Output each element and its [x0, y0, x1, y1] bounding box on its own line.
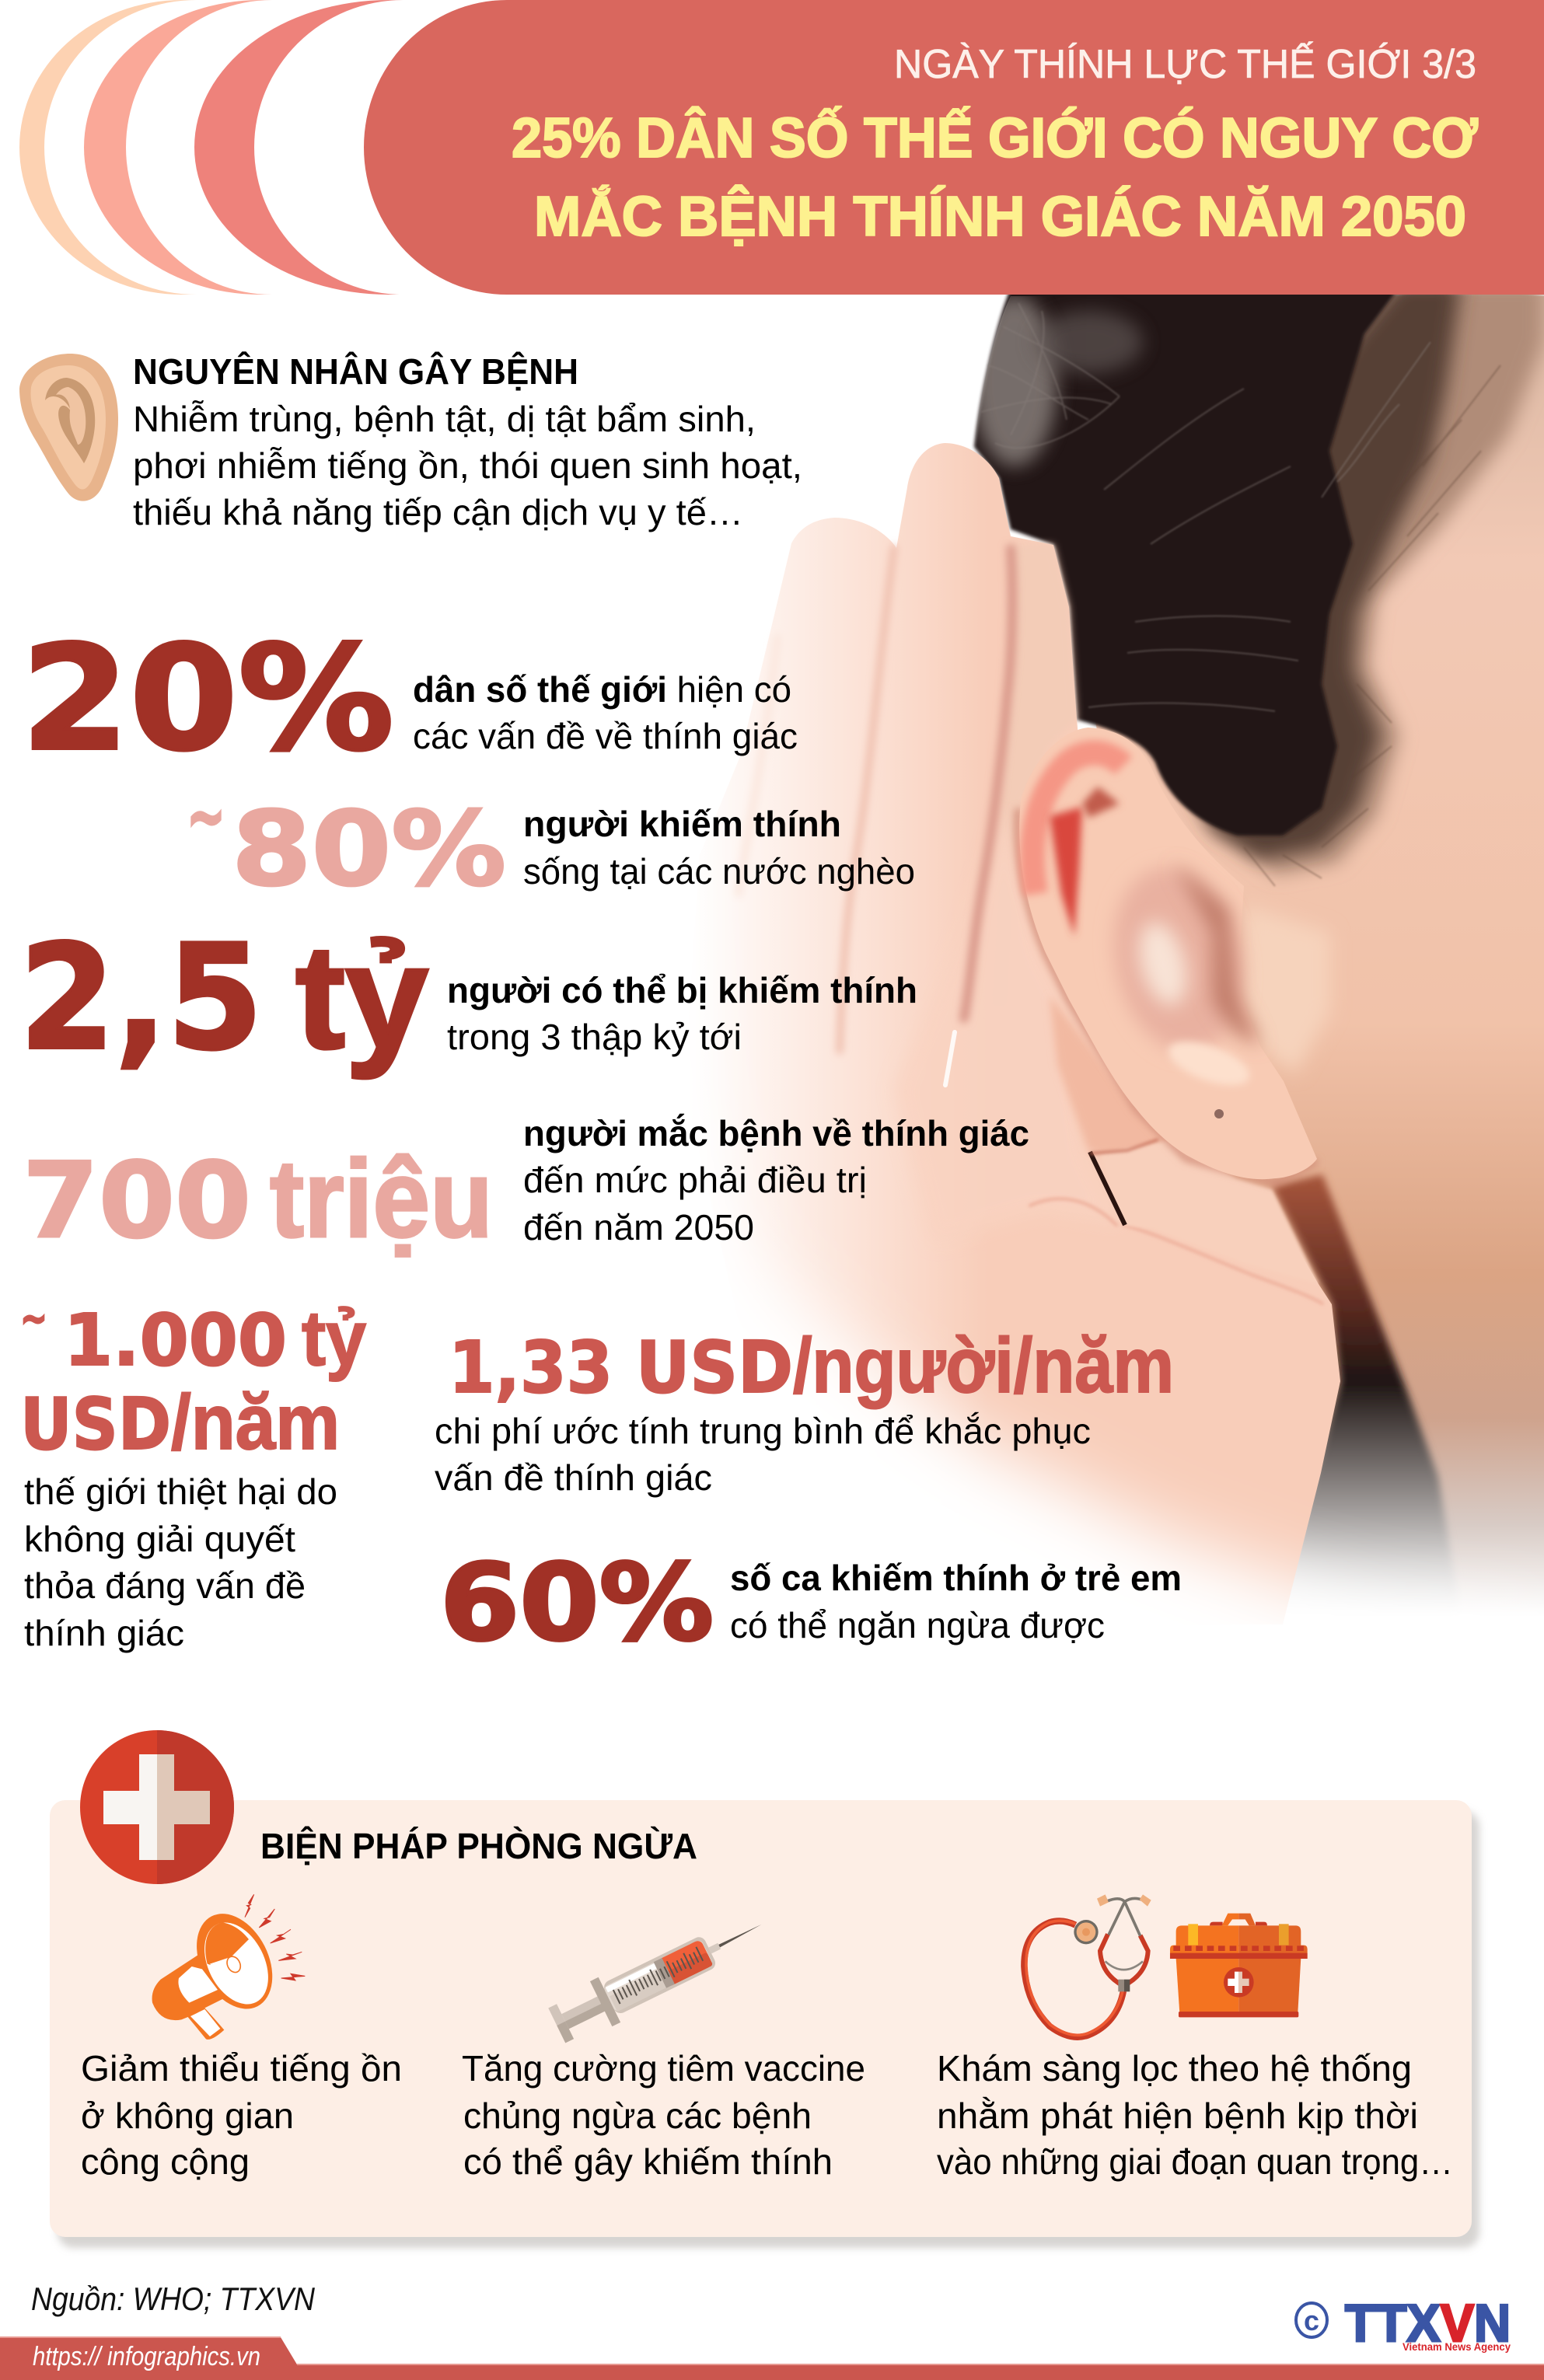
stat: 700 triệu: đến mức phải điều trị — [523, 1160, 867, 1200]
title line 1: 25% DÂN SỐ THẾ GIỚI CÓ NGUY CƠ — [512, 106, 1479, 169]
logo: TTXVN: c — [1304, 2305, 1319, 2336]
stat: 60% — [440, 1542, 1182, 1665]
stat: 60%: 60% — [440, 1542, 714, 1665]
stat: 700 triệu: đến năm 2050 — [523, 1207, 754, 1248]
icon: ear — [19, 354, 118, 501]
icon: first aid kit — [1170, 1914, 1308, 2017]
stat: 1,33 USD/người/năm: /người/năm — [793, 1322, 1174, 1409]
panel: prevention measures — [50, 1730, 1479, 2248]
stat: 1,33 USD/người/năm: 1,33 USD — [449, 1326, 793, 1409]
photo: woman cupping hand behind ear — [724, 295, 1544, 1618]
stat: ~80%: 80% — [232, 790, 506, 909]
causes text block: phơi nhiễm tiếng ồn, thói quen sinh hoạt, — [133, 445, 802, 486]
ear outer shape — [1019, 728, 1317, 1179]
header banner with concentric sound waves — [19, 0, 1544, 295]
hand: palm under fingers — [894, 808, 1123, 1244]
stat: 20% — [21, 614, 798, 783]
measure 3 text — [937, 2048, 1453, 2182]
stat description: số ca khiếm thính ở trẻ em — [730, 1558, 1182, 1598]
stat description: chi phí ước tính trung bình để khắc phục — [435, 1411, 1091, 1451]
icon: syringe — [546, 1903, 773, 2048]
ear — [1018, 728, 1317, 1183]
source: Nguồn: WHO; TTXVN — [31, 2281, 316, 2317]
ear highlight — [1131, 917, 1195, 1010]
hair: outer fine strands — [1244, 365, 1500, 886]
stat: 20%: 20% — [21, 614, 394, 783]
stat: ~1.000 tỷ USD/năm: ~ — [20, 1293, 47, 1343]
hand with fingers — [684, 443, 1340, 1624]
causes heading: NGUYÊN NHÂN GÂY BỆNH — [133, 351, 578, 392]
mole — [1214, 1109, 1224, 1118]
stat description: người khiếm thính — [523, 804, 841, 844]
wave: peach — [19, 0, 544, 295]
stat: 2,5 tỷ: trong 3 thập kỷ tới — [447, 1017, 742, 1057]
stat: 700 triệu: triệu — [270, 1137, 493, 1261]
wave: pink — [194, 0, 700, 295]
ear inner red fold — [1050, 807, 1082, 937]
stat: 700 triệu — [23, 1113, 1029, 1262]
icon: medical cross badge — [80, 1730, 234, 1884]
stat: 2,5 tỷ: 2,5 — [19, 913, 263, 1082]
shadow between hand and neck — [1272, 1174, 1462, 1621]
ear concha shadow — [1098, 856, 1258, 1064]
icon: megaphone — [152, 1894, 305, 2040]
causes text block — [133, 351, 802, 532]
stat: 1,33 USD/người/năm: vấn đề thính giác — [435, 1457, 712, 1498]
measure 1 text — [81, 2048, 402, 2182]
stat: ~1.000 tỷ USD/năm: thính giác — [24, 1613, 184, 1653]
stat: 2,5 tỷ — [19, 913, 917, 1082]
stat: 2,5 tỷ: tỷ — [295, 915, 428, 1080]
hair: dark core — [974, 288, 1399, 836]
banner shape — [364, 0, 1544, 295]
stat: 1,33 USD/người/năm — [435, 1322, 1174, 1498]
fade to white over lower left of hand — [544, 544, 1544, 1788]
measure 2 text: chủng ngừa các bệnh — [463, 2096, 812, 2136]
hand: side of finger behind ear — [987, 544, 1077, 1010]
measure 2 text — [462, 2048, 865, 2182]
causes text block: thiếu khả năng tiếp cận dịch vụ y tế… — [133, 492, 743, 532]
measure 2 text: Tăng cường tiêm vaccine — [462, 2048, 865, 2089]
measure 3 text: vào những giai đoạn quan trọng… — [937, 2141, 1453, 2182]
face and neck skin — [1011, 296, 1544, 1624]
ear helix pink rim — [1032, 753, 1123, 894]
url: https:// infographics.vn — [33, 2342, 260, 2371]
stat description: người có thể bị khiếm thính — [447, 970, 917, 1010]
dark gap between palm and thumb — [1090, 1152, 1125, 1225]
causes body: Nhiễm trùng, bệnh tật, dị tật bẩm sinh, — [133, 399, 756, 439]
measure 3 text: nhằm phát hiện bệnh kịp thời — [937, 2096, 1418, 2136]
stat: ~1.000 tỷ USD/năm: USD — [20, 1383, 171, 1466]
stat: ~80% — [187, 776, 915, 909]
fold line on thumb — [1090, 1139, 1158, 1153]
hair strands — [981, 303, 1430, 711]
fingertip behind earlobe — [1050, 996, 1174, 1158]
stat description: thế giới thiệt hại do — [24, 1471, 337, 1512]
measure 1 text: công cộng — [81, 2141, 250, 2182]
earlobe highlight — [1163, 1033, 1255, 1094]
stat: ~1.000 tỷ USD/năm: /năm — [171, 1379, 340, 1466]
panel background — [50, 1800, 1472, 2237]
stat: ~1.000 tỷ USD/năm: tỷ — [302, 1295, 366, 1382]
stat: ~1.000 tỷ USD/năm: thỏa đáng vấn đề — [24, 1565, 306, 1606]
stat: ~80%: sống tại các nước nghèo — [523, 851, 915, 892]
logo: TTXVN: TTXVN — [1345, 2294, 1511, 2353]
banner kicker: NGÀY THÍNH LỰC THẾ GIỚI 3/3 — [894, 41, 1476, 87]
measure 1 text: ở không gian — [81, 2096, 294, 2136]
title line 2: MẮC BỆNH THÍNH GIÁC NĂM 2050 — [534, 185, 1466, 248]
footer bar with url tab — [0, 2337, 1544, 2380]
panel shadow — [58, 1811, 1479, 2248]
hand: finger creases — [739, 548, 1322, 1303]
stat: ~1.000 tỷ USD/năm: 1.000 — [64, 1299, 287, 1382]
panel heading: BIỆN PHÁP PHÒNG NGỪA — [260, 1826, 697, 1866]
stat: ~1.000 tỷ USD/năm — [20, 1293, 366, 1653]
stat: ~80%: ~ — [187, 776, 225, 857]
stat description: người mắc bệnh về thính giác — [523, 1113, 1029, 1153]
stat: 700 triệu: 700 — [23, 1140, 251, 1262]
icon: stethoscope — [1024, 1894, 1151, 2037]
hair: mid fringe — [1166, 280, 1462, 859]
wave: salmon — [84, 0, 622, 295]
face tragus beside ear — [1241, 906, 1330, 1073]
ear rim shadow on hand — [1018, 808, 1317, 1183]
measure 3 text: Khám sàng lọc theo hệ thống — [937, 2048, 1412, 2089]
logo: TTXVN: Vietnam News Agency — [1403, 2340, 1511, 2353]
measure 1 text: Giảm thiểu tiếng ồn — [81, 2048, 402, 2089]
stat: 60%: có thể ngăn ngừa được — [730, 1605, 1105, 1645]
hair: light fringe — [1166, 280, 1544, 874]
measure 2 text: có thể gây khiếm thính — [463, 2141, 833, 2182]
stat description: dân số thế giới hiện có — [413, 669, 791, 710]
hair: grey shine — [972, 295, 1143, 466]
stat: ~1.000 tỷ USD/năm: không giải quyết — [24, 1519, 295, 1559]
stat: 20%: các vấn đề về thính giác — [413, 716, 798, 756]
thumb below ear — [1100, 1139, 1319, 1284]
